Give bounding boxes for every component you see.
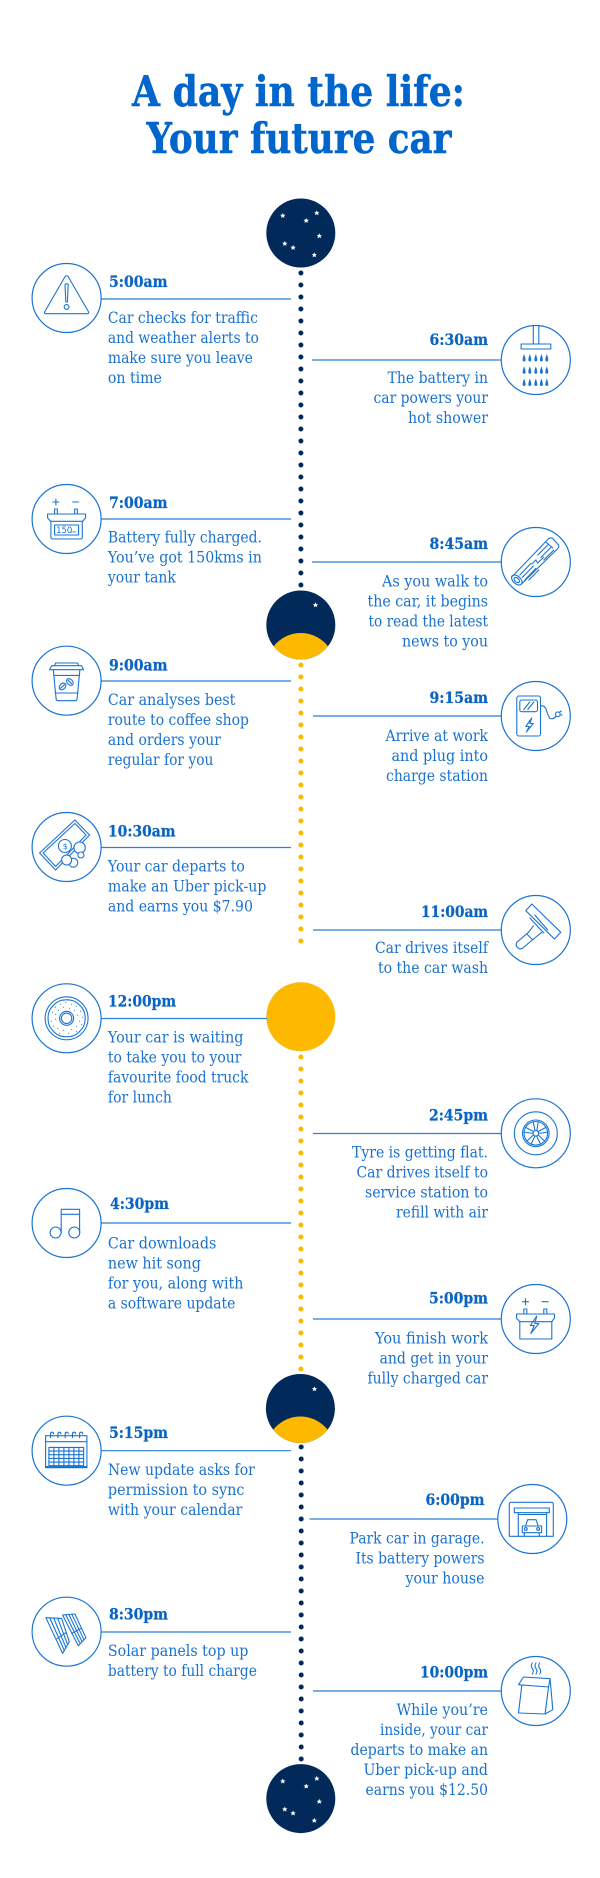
description: Car drives itself to: [356, 1162, 488, 1181]
icon: garage: [498, 1484, 567, 1554]
description: and earns you $7.90: [108, 897, 253, 916]
description: with your calendar: [108, 1500, 243, 1519]
icon: shower: [501, 326, 570, 394]
description: to read the latest: [368, 612, 488, 631]
description: Uber pick-up and: [364, 1760, 488, 1779]
description: charge station: [386, 766, 488, 785]
title: A day in the life:: [131, 67, 465, 117]
description: and orders your: [108, 730, 221, 749]
description: [107, 857, 266, 916]
icon: money: [32, 812, 101, 882]
description: inside, your car: [380, 1720, 488, 1739]
description: favourite food truck: [108, 1067, 249, 1086]
description: [350, 1528, 484, 1587]
description: Tyre is getting flat.: [352, 1142, 488, 1161]
event: 8:30pm: [32, 1597, 291, 1680]
timeline dots: evening: [299, 1447, 304, 1759]
description: Car downloads: [108, 1233, 216, 1252]
time: 9:15am: [430, 688, 489, 707]
event: 2:45pm: [313, 1099, 570, 1221]
event: 6:00pm: [310, 1484, 567, 1587]
description: [108, 1460, 255, 1519]
event: 5:00am: [32, 264, 291, 387]
description: [108, 1233, 243, 1312]
description: on time: [108, 368, 162, 387]
event: 5:00pm: [313, 1284, 570, 1387]
icon: newspaper: [501, 528, 570, 596]
description: refill with air: [396, 1202, 488, 1221]
description: Battery fully charged.: [108, 528, 262, 547]
description: service station to: [365, 1182, 488, 1201]
icon: paper bag with steam: [501, 1656, 570, 1726]
time: 10:30am: [108, 822, 176, 841]
event: 10:30am: [32, 812, 291, 916]
icon: music notes: [32, 1188, 101, 1258]
time: 10:00pm: [420, 1663, 489, 1682]
icon: battery 150km: [32, 484, 101, 554]
description: car powers your: [374, 388, 488, 407]
midday sun circle: [266, 982, 335, 1051]
description: As you walk to: [381, 572, 488, 591]
description: [368, 572, 488, 651]
description: for lunch: [108, 1087, 172, 1106]
time: 12:00pm: [108, 992, 177, 1011]
time: 8:45am: [430, 534, 489, 553]
event: 8:45am: [312, 528, 570, 651]
description: news to you: [402, 632, 488, 651]
sunset circle: [266, 1374, 335, 1443]
description: [368, 1328, 488, 1387]
description: You finish work: [374, 1328, 488, 1347]
time: 4:30pm: [110, 1194, 170, 1213]
description: [385, 726, 488, 785]
sunrise circle: [266, 590, 336, 660]
time: 5:00am: [109, 272, 168, 291]
event: 12:00pm: [32, 984, 267, 1106]
timeline dots: night, early morning: [298, 273, 303, 585]
description: Solar panels top up: [108, 1641, 248, 1660]
icon: warning triangle: [32, 264, 101, 332]
description: a software update: [108, 1293, 235, 1312]
description: [352, 1142, 488, 1221]
event: 6:30am: [312, 326, 570, 427]
event: 4:30pm: [32, 1188, 291, 1312]
description: Your car is waiting: [107, 1027, 243, 1046]
time: 9:00am: [109, 656, 168, 675]
description: [107, 528, 262, 587]
event: 10:00pm: [313, 1656, 570, 1799]
time: 5:00pm: [429, 1288, 489, 1307]
description: earns you $12.50: [366, 1780, 488, 1799]
description: [108, 1641, 257, 1680]
description: Its battery powers: [356, 1548, 484, 1567]
icon: money: $: [63, 842, 68, 851]
description: make sure you leave: [108, 348, 253, 367]
icon: calendar: [32, 1416, 101, 1485]
description: [108, 308, 259, 387]
timeline dots: morning: [298, 665, 303, 941]
event: 11:00am: [313, 896, 570, 977]
event: 9:00am: [32, 646, 291, 769]
description: While you’re: [396, 1700, 488, 1719]
description: [350, 1700, 488, 1799]
description: The battery in: [388, 368, 488, 387]
icon: battery 150km: 150: [56, 526, 72, 536]
time: 11:00am: [421, 902, 489, 921]
event: 5:15pm: [32, 1416, 291, 1519]
description: to take you to your: [108, 1047, 242, 1066]
description: new hit song: [108, 1253, 201, 1272]
icon: charge station: [501, 682, 570, 750]
event: 7:00am: [32, 484, 291, 587]
description: route to coffee shop: [108, 710, 249, 729]
time: 5:15pm: [109, 1423, 169, 1442]
icon: charged battery: [501, 1284, 570, 1354]
description: Car analyses best: [108, 690, 236, 709]
description: [375, 938, 489, 977]
icon: wheel: [501, 1099, 570, 1168]
description: and plug into: [392, 746, 488, 765]
description: your house: [405, 1568, 484, 1587]
description: to the car wash: [378, 958, 488, 977]
description: Arrive at work: [385, 726, 488, 745]
icon: solar panels: [32, 1597, 101, 1666]
description: You’ve got 150kms in: [107, 548, 262, 567]
description: Car drives itself: [375, 938, 489, 957]
time: 6:00pm: [426, 1490, 485, 1509]
description: make an Uber pick-up: [108, 877, 266, 896]
description: regular for you: [108, 750, 213, 769]
description: and get in your: [380, 1348, 488, 1367]
description: [374, 368, 488, 427]
time: 8:30pm: [109, 1604, 169, 1623]
description: New update asks for: [108, 1460, 255, 1479]
time: 7:00am: [109, 493, 168, 512]
icon: coffee cup: [32, 646, 101, 715]
description: and weather alerts to: [108, 328, 259, 347]
night sky circle: end: [266, 1764, 335, 1833]
description: Your car departs to: [107, 857, 245, 876]
description: for you, along with: [108, 1273, 243, 1292]
title: Your future car: [146, 114, 452, 164]
description: Park car in garage.: [350, 1528, 484, 1547]
night sky circle: start: [266, 198, 335, 268]
title: [131, 67, 465, 164]
icon: squeegee: [501, 896, 570, 964]
time: 2:45pm: [429, 1106, 489, 1125]
icon: battery 150km: km: [71, 530, 77, 534]
event: 9:15am: [313, 682, 570, 785]
description: fully charged car: [368, 1368, 488, 1387]
description: [108, 690, 249, 769]
description: Car checks for traffic: [108, 308, 258, 327]
timeline dots: afternoon: [298, 1057, 303, 1369]
description: your tank: [107, 568, 176, 587]
description: departs to make an: [350, 1740, 488, 1759]
icon: donut: [32, 984, 101, 1053]
description: the car, it begins: [368, 592, 488, 611]
time: 6:30am: [430, 330, 489, 349]
description: hot shower: [408, 408, 488, 427]
description: [107, 1027, 249, 1106]
description: battery to full charge: [108, 1661, 257, 1680]
description: permission to sync: [108, 1480, 244, 1499]
